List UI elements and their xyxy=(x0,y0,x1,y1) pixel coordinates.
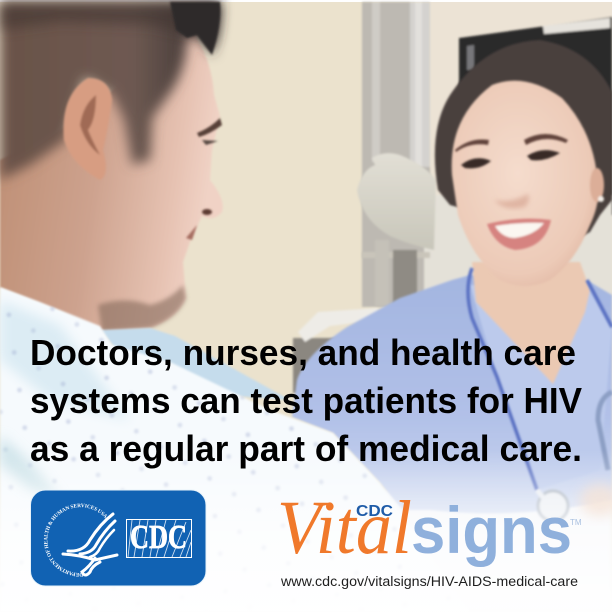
website URL: www.cdc.gov/vitalsigns/HIV-AIDS-medical-care xyxy=(280,574,578,589)
photo: medical equipment xyxy=(293,153,612,393)
gown body xyxy=(0,287,470,612)
patient brow, eye and nostril xyxy=(186,118,222,240)
pale backdrop below the scrubs xyxy=(380,490,612,612)
patient crown shadow xyxy=(0,2,220,40)
patient hair xyxy=(0,2,220,180)
trademark: TM xyxy=(570,518,582,527)
nurse stethoscope chest piece xyxy=(537,392,612,521)
nurse ear and earring xyxy=(590,168,604,202)
patient face and neck xyxy=(0,30,223,332)
nurse inner shirt xyxy=(470,285,612,490)
HHS and CDC logo badge xyxy=(30,490,206,586)
peach glow at right edge xyxy=(580,484,612,516)
nurse eyes and brows xyxy=(455,134,568,168)
photo: monitor xyxy=(459,17,612,215)
nurse neck xyxy=(472,262,590,384)
patient beard shadow xyxy=(98,285,186,332)
gown blue shading xyxy=(0,300,130,420)
gown spot pattern xyxy=(0,287,470,612)
CDC tag: CDC xyxy=(356,503,393,520)
photo: wall-mounted pole xyxy=(362,2,430,307)
photo: nurse xyxy=(292,40,612,521)
bottom white fade xyxy=(0,450,612,612)
nurse nose xyxy=(494,194,529,208)
gown collar shadow xyxy=(100,328,290,400)
nurse hair xyxy=(435,40,612,240)
nurse stethoscope tubing xyxy=(468,268,612,490)
HHS ring text: DEPARTMENT OF HEALTH & HUMAN SERVICES USA xyxy=(44,504,107,577)
headline text: as a regular part of medical care. xyxy=(30,428,582,469)
nurse face xyxy=(452,81,598,286)
photo: male patient xyxy=(0,2,223,332)
headline text xyxy=(30,332,582,469)
photo: hospital gown xyxy=(0,287,470,612)
HHS eagle icon xyxy=(63,514,117,575)
Vital wordmark: Vital xyxy=(277,486,412,570)
Vital Signs logo xyxy=(277,486,582,570)
signs wordmark: signs xyxy=(411,493,572,567)
patient ear xyxy=(64,78,112,180)
patient hair front edge xyxy=(170,2,220,55)
nurse smile xyxy=(487,219,551,250)
CDC box logo: CDC xyxy=(130,519,187,556)
nurse scrubs xyxy=(292,275,612,513)
headline text: systems can test patients for HIV xyxy=(30,380,582,421)
gown fold shadow xyxy=(0,435,62,500)
headline text: Doctors, nurses, and health care xyxy=(30,332,576,373)
